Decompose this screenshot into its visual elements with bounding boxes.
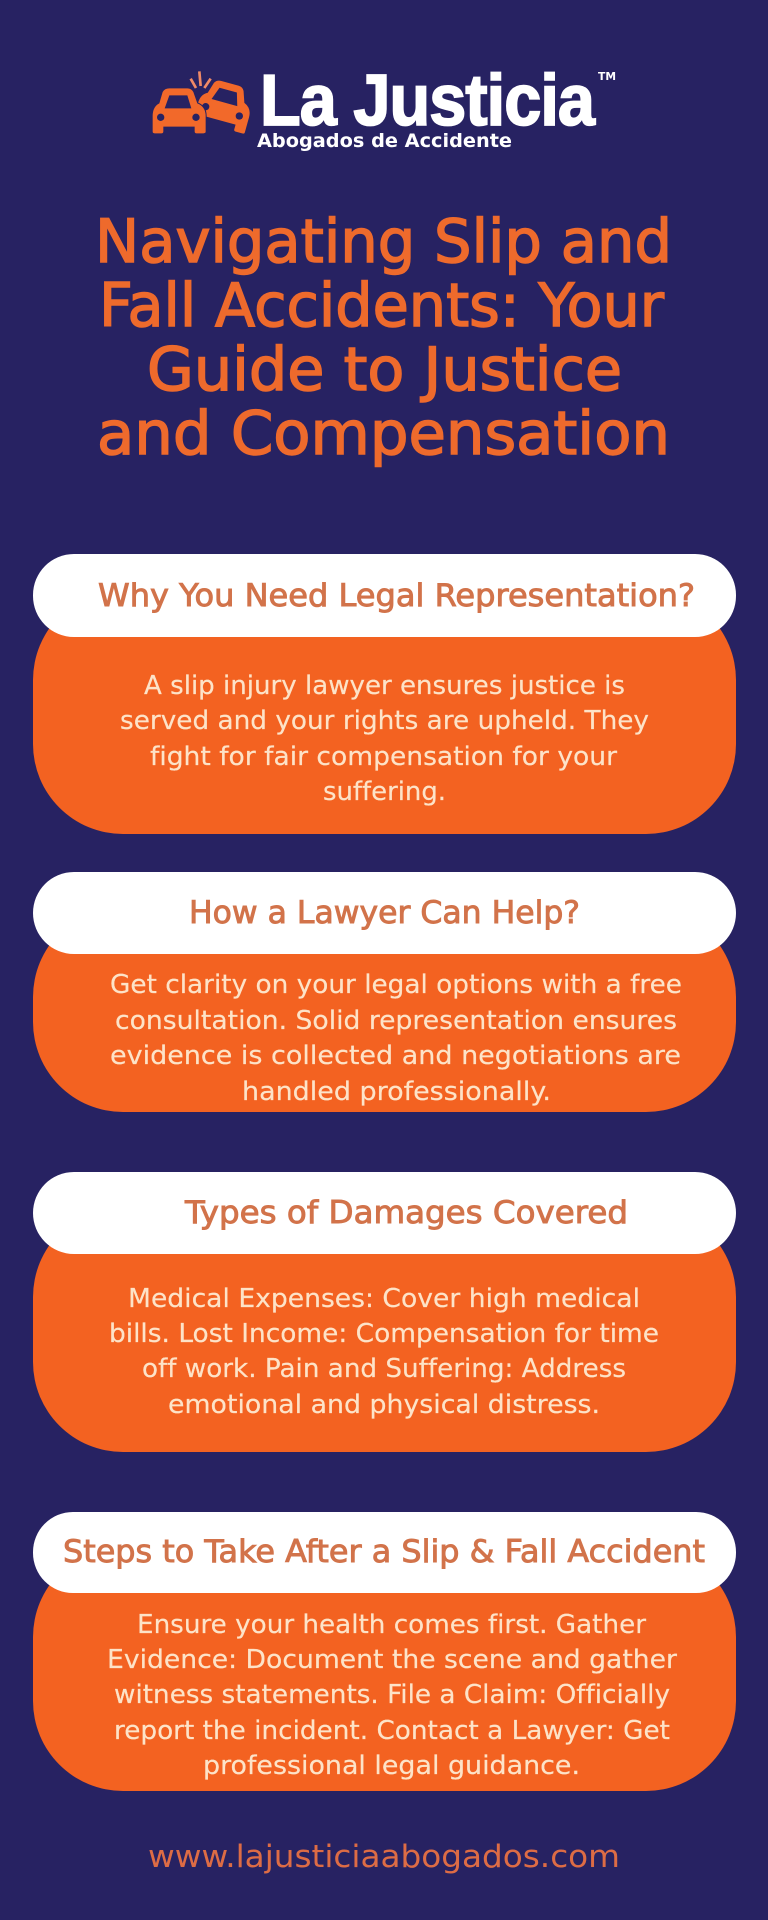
body text: fight for fair compensation for your bbox=[150, 742, 617, 772]
body text: professional legal guidance. bbox=[203, 1751, 580, 1781]
body text: Medical Expenses: Cover high medical bbox=[128, 1284, 640, 1314]
body text: evidence is collected and negotiations are bbox=[110, 1041, 681, 1071]
heading pill bbox=[33, 1512, 736, 1593]
heading: How a Lawyer Can Help? bbox=[189, 895, 580, 931]
logo tagline: Abogados de Accidente bbox=[257, 130, 512, 152]
body text: witness statements. File a Claim: Officially bbox=[114, 1680, 670, 1710]
panel body bbox=[33, 1547, 736, 1791]
heading: Steps to Take After a Slip & Fall Accident bbox=[63, 1534, 705, 1570]
panel: how a lawyer can help bbox=[33, 872, 736, 1112]
body text bbox=[110, 970, 682, 1107]
body text: suffering. bbox=[323, 777, 446, 807]
body text: Ensure your health comes first. Gather bbox=[137, 1610, 646, 1640]
panel: steps to take after a slip and fall accident bbox=[33, 1512, 736, 1791]
title: and Compensation bbox=[97, 399, 670, 469]
body text bbox=[107, 1610, 677, 1781]
body text: served and your rights are upheld. They bbox=[120, 706, 649, 736]
panel body bbox=[33, 1207, 736, 1452]
title: Navigating Slip and bbox=[95, 207, 672, 277]
body text: bills. Lost Income: Compensation for time bbox=[109, 1319, 659, 1349]
body text bbox=[109, 1284, 659, 1420]
logo wordmark: La Justicia bbox=[260, 61, 596, 141]
panel body bbox=[33, 907, 736, 1112]
body text: Get clarity on your legal options with a free bbox=[110, 970, 682, 1000]
body text: emotional and physical distress. bbox=[168, 1390, 600, 1420]
heading: Why You Need Legal Representation? bbox=[98, 578, 695, 614]
body text: A slip injury lawyer ensures justice is bbox=[144, 671, 625, 701]
website url: www.lajusticiaabogados.com bbox=[148, 1839, 620, 1875]
body text: report the incident. Contact a Lawyer: Get bbox=[114, 1716, 670, 1746]
panel: types of damages covered bbox=[33, 1172, 736, 1452]
heading pill bbox=[33, 872, 736, 954]
body text: handled professionally. bbox=[242, 1077, 551, 1107]
icon: crashed cars bbox=[153, 71, 256, 134]
body text: consultation. Solid representation ensures bbox=[115, 1006, 677, 1036]
body text: Evidence: Document the scene and gather bbox=[107, 1645, 677, 1675]
logo bbox=[153, 61, 616, 152]
trademark: TM bbox=[598, 70, 616, 83]
heading pill bbox=[33, 1172, 736, 1254]
body text bbox=[120, 671, 649, 807]
heading pill bbox=[33, 554, 736, 637]
heading: Types of Damages Covered bbox=[184, 1195, 628, 1231]
title: Fall Accidents: Your bbox=[99, 271, 664, 341]
panel: why you need legal representation bbox=[33, 554, 736, 834]
body text: off work. Pain and Suffering: Address bbox=[142, 1354, 626, 1384]
panel body bbox=[33, 590, 736, 834]
title: Guide to Justice bbox=[147, 335, 622, 405]
title bbox=[95, 207, 672, 469]
